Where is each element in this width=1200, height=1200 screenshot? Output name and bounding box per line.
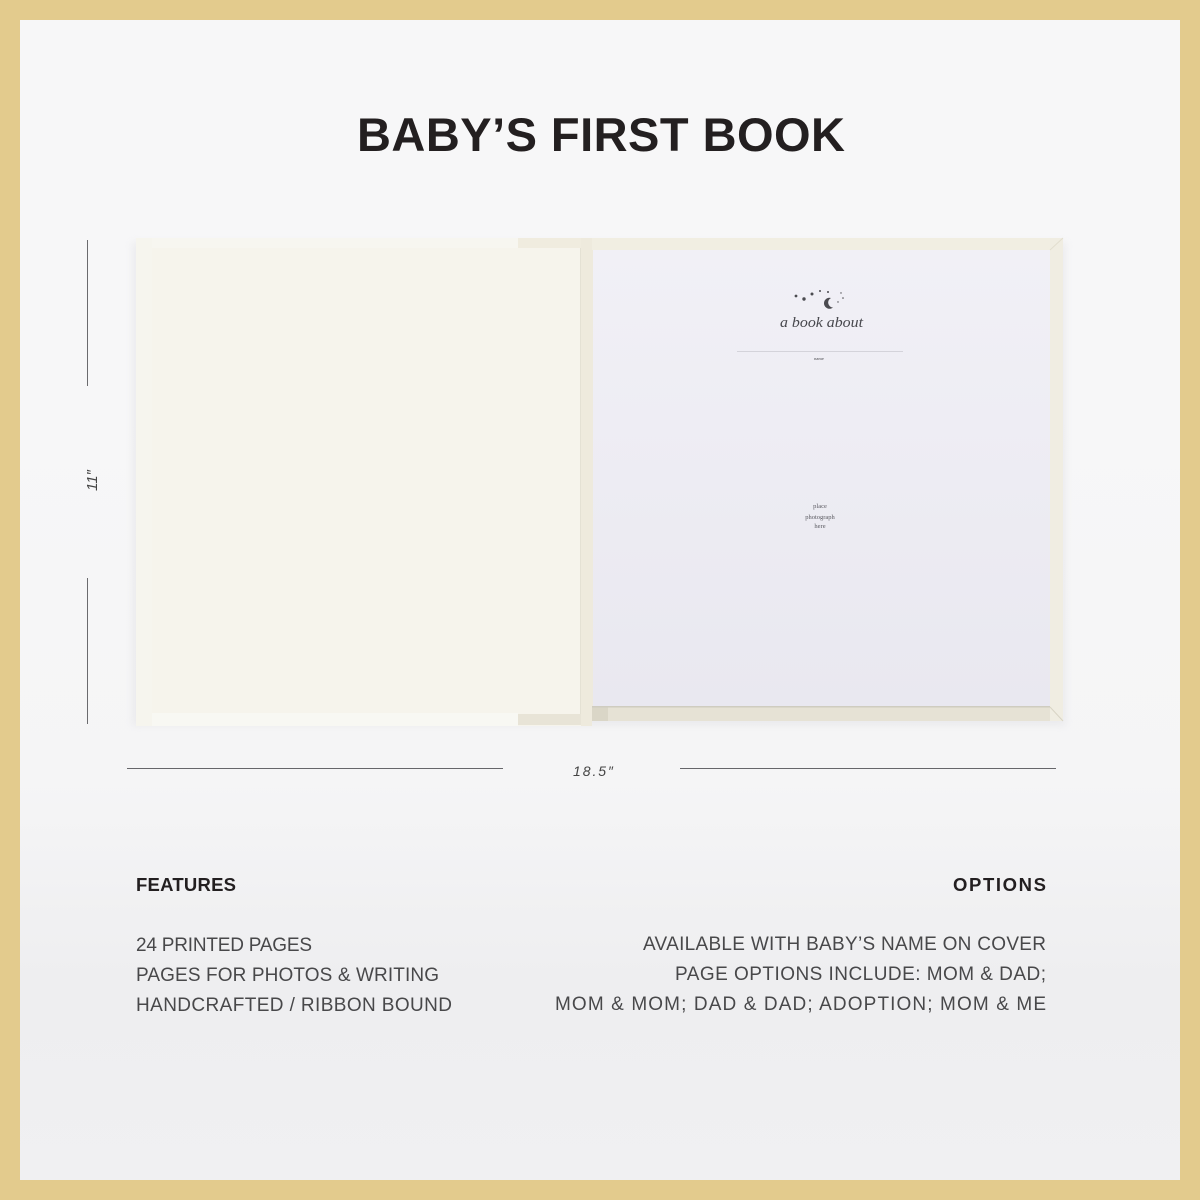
options panel [555,874,1046,1015]
photo placeholder text: here [814,523,826,530]
features list: HANDCRAFTED / RIBBON BOUND [136,995,452,1016]
page heading text: a book about [780,315,864,331]
options list: AVAILABLE WITH BABY’S NAME ON COVER [643,934,1046,955]
photo placeholder text: place [813,503,827,510]
features list [136,935,452,1016]
options list: MOM & MOM; DAD & DAD; ADOPTION; MOM & ME [555,994,1046,1015]
spine edge [581,238,592,726]
title: BABY’S FIRST BOOK [357,108,845,161]
options list: PAGE OPTIONS INCLUDE: MOM & DAD; [675,964,1046,985]
photo placeholder text: photograph [805,514,836,521]
endpaper [152,248,581,713]
options list [555,934,1046,1015]
page heading: stars and moon [795,290,844,309]
features heading: FEATURES [136,874,236,895]
name line [737,351,903,352]
width label: 18.5″ [573,763,614,779]
right cover [592,238,1063,721]
name label: name [814,356,824,361]
photo placeholder text [805,503,836,530]
open book [132,238,1066,726]
features list: 24 PRINTED PAGES [136,935,312,956]
features panel [136,874,452,1016]
height label: 11″ [84,469,101,491]
inner page [593,250,1050,706]
options heading: OPTIONS [953,874,1046,895]
features list: PAGES FOR PHOTOS & WRITING [136,965,439,986]
left cover [136,238,592,726]
